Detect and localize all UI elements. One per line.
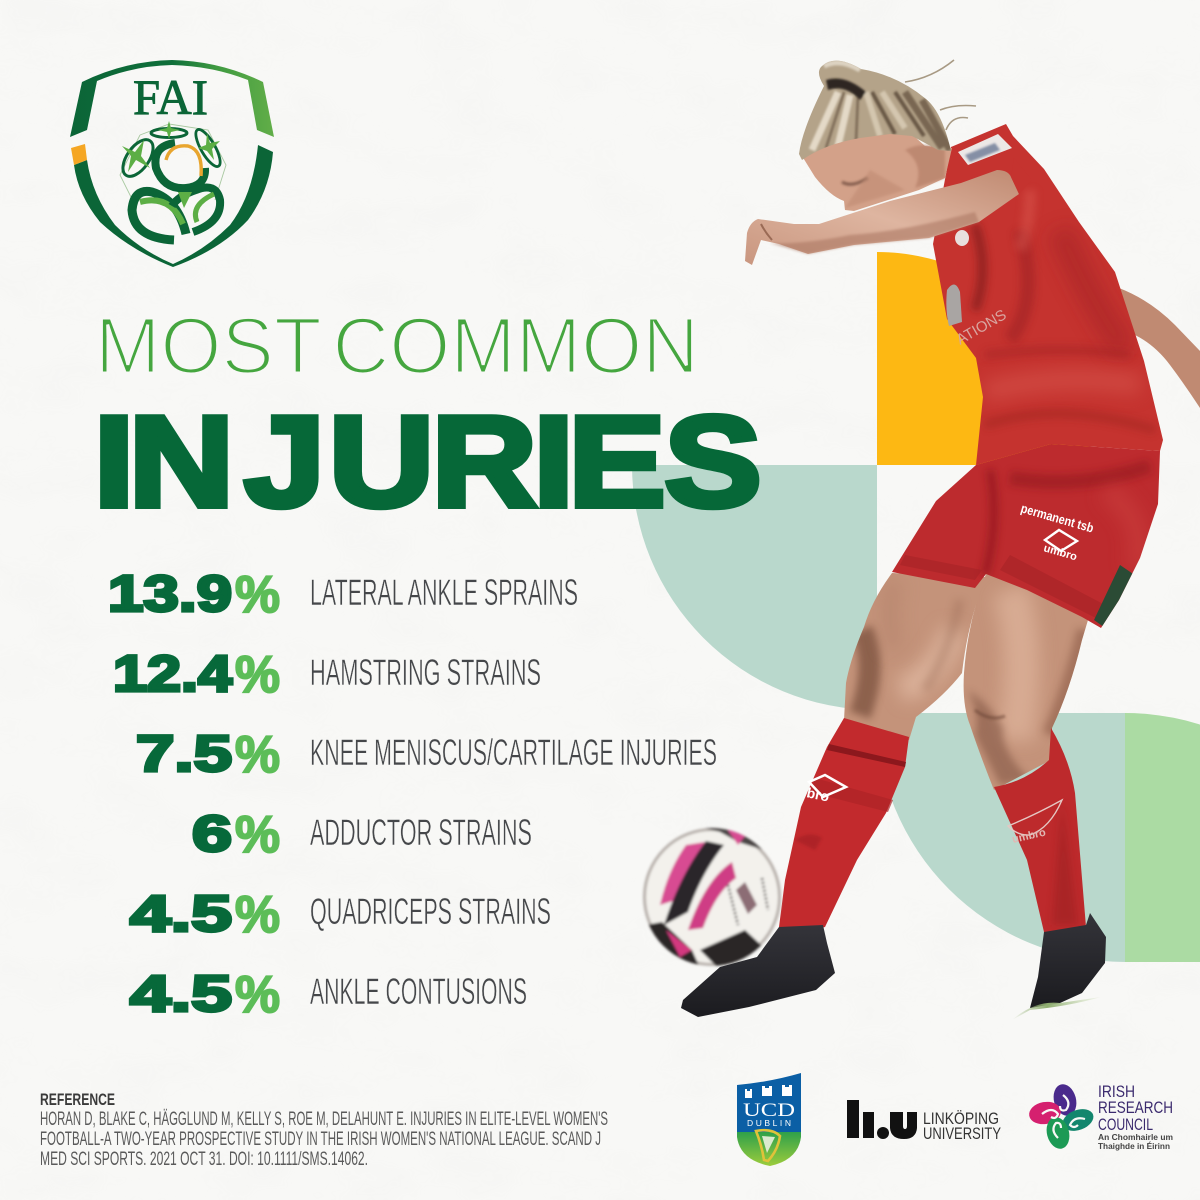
stat row: ankle contusions: ANKLE CONTUSIONS	[310, 971, 527, 1012]
player kicking leg	[844, 573, 986, 740]
decorative shapes	[632, 252, 1200, 962]
player near arm	[745, 170, 1019, 265]
reference citation: FOOTBALL-A TWO-YEAR PROSPECTIVE STUDY IN THE IRISH WOMEN'S NATIONAL LEAGUE. SCAND J	[40, 1128, 601, 1150]
player illustration	[643, 60, 1200, 1020]
player face	[802, 128, 952, 211]
player right boot	[1030, 913, 1106, 1008]
title: INJURIES: INJURIES	[94, 390, 762, 534]
player shorts: umbro	[1042, 542, 1079, 563]
logo: Linkoping University: LINKÖPING	[923, 1109, 999, 1128]
logo: Irish Research Council: An Chomhairle um	[1098, 1133, 1173, 1142]
crest orange flash	[71, 144, 87, 165]
stat row: knee meniscus: 7.5	[136, 725, 232, 782]
logo: Irish Research Council	[1027, 1082, 1173, 1151]
logo: Linkoping University: UNIVERSITY	[923, 1124, 1001, 1143]
stat row: ankle contusions: 4.5	[130, 965, 232, 1022]
crest letters FAI: FAI	[133, 69, 208, 125]
player standing sock: umbro	[1011, 826, 1047, 846]
crest shield top band	[70, 60, 274, 137]
crest football emblem	[117, 121, 226, 240]
jersey badge	[955, 230, 969, 246]
stat row: adductor strains	[192, 805, 532, 864]
stat row: lateral ankle sprains: LATERAL ANKLE SPRAINS	[310, 572, 578, 613]
stat row: lateral ankle sprains: %	[235, 566, 280, 624]
stat row: hamstring strains: 12.4	[113, 645, 233, 702]
logo: Irish Research Council: RESEARCH	[1098, 1098, 1173, 1117]
reference citation	[40, 1108, 608, 1170]
stat row: adductor strains: %	[235, 806, 280, 864]
logo: UCD Dublin	[737, 1073, 801, 1166]
stat row: lateral ankle sprains: 13.9	[108, 565, 232, 622]
logo: UCD Dublin: UCD	[743, 1100, 795, 1121]
stat row: knee meniscus	[136, 725, 717, 784]
logo: UCD Dublin: DUBLIN	[747, 1118, 791, 1128]
reference heading: REFERENCE	[40, 1090, 115, 1109]
stat row: hamstring strains	[113, 645, 541, 704]
logo: Irish Research Council: IRISH	[1098, 1082, 1135, 1101]
shape: yellow quarter circle	[877, 252, 1090, 465]
stat row: quadriceps strains: QUADRICEPS STRAINS	[310, 891, 551, 932]
reference citation: MED SCI SPORTS. 2021 OCT 31. DOI: 10.1111/SMS.14062.	[40, 1148, 368, 1170]
shape: lower sage quarter circle	[876, 713, 1125, 962]
shape: light green quarter circle	[1125, 713, 1200, 962]
stat row: adductor strains: 6	[192, 805, 232, 862]
stat row: quadriceps strains	[130, 885, 551, 944]
player standing sock	[994, 728, 1086, 934]
title: MOST COMMON: MOST COMMON	[95, 301, 699, 390]
jersey sleeve patch	[958, 134, 1012, 165]
stat row: knee meniscus: KNEE MENISCUS/CARTILAGE INJURIES	[310, 732, 717, 773]
player standing leg	[964, 574, 1088, 790]
logo: Linkoping University	[847, 1100, 1001, 1143]
stat row: lateral ankle sprains	[108, 565, 578, 624]
player shorts	[892, 444, 1160, 630]
stat row: adductor strains: ADDUCTOR STRAINS	[310, 812, 532, 853]
jersey sponsor mark	[946, 284, 962, 326]
stat row: hamstring strains: HAMSTRING STRAINS	[310, 652, 541, 693]
stat row: quadriceps strains: %	[235, 886, 280, 944]
stat row: ankle contusions: %	[235, 966, 280, 1024]
player left boot	[681, 925, 835, 1017]
stat row: quadriceps strains: 4.5	[130, 885, 232, 942]
player shorts: permanent tsb	[1019, 500, 1095, 536]
player kicking sock: bro	[805, 784, 831, 805]
injury statistics list	[108, 565, 717, 1024]
turf under right boot	[1012, 997, 1101, 1020]
player jersey	[933, 124, 1163, 465]
player kicking sock	[779, 718, 909, 930]
player far arm	[1110, 285, 1200, 408]
logo: Irish Research Council: Thaighde in Éirinn	[1098, 1142, 1170, 1151]
reference citation: HORAN D, BLAKE C, HÄGGLUND M, KELLY S, ROE M, DELAHUNT E. INJURIES IN ELITE-LEVEL WOMEN'S	[40, 1108, 608, 1130]
jersey sponsor text: ATIONS	[954, 306, 1009, 348]
reference block	[40, 1090, 608, 1170]
crest lower right band	[173, 145, 273, 267]
stat row: hamstring strains: %	[235, 646, 280, 704]
stat row: ankle contusions	[130, 965, 527, 1024]
shape: sage quarter circle	[632, 465, 877, 710]
jersey sleeve over arm	[1011, 158, 1032, 194]
player hair	[799, 60, 976, 160]
football	[643, 822, 781, 975]
stat row: knee meniscus: %	[235, 726, 280, 784]
crest lower left band	[74, 160, 173, 267]
logo: Irish Research Council: COUNCIL	[1098, 1115, 1153, 1134]
FAI crest	[70, 60, 274, 267]
